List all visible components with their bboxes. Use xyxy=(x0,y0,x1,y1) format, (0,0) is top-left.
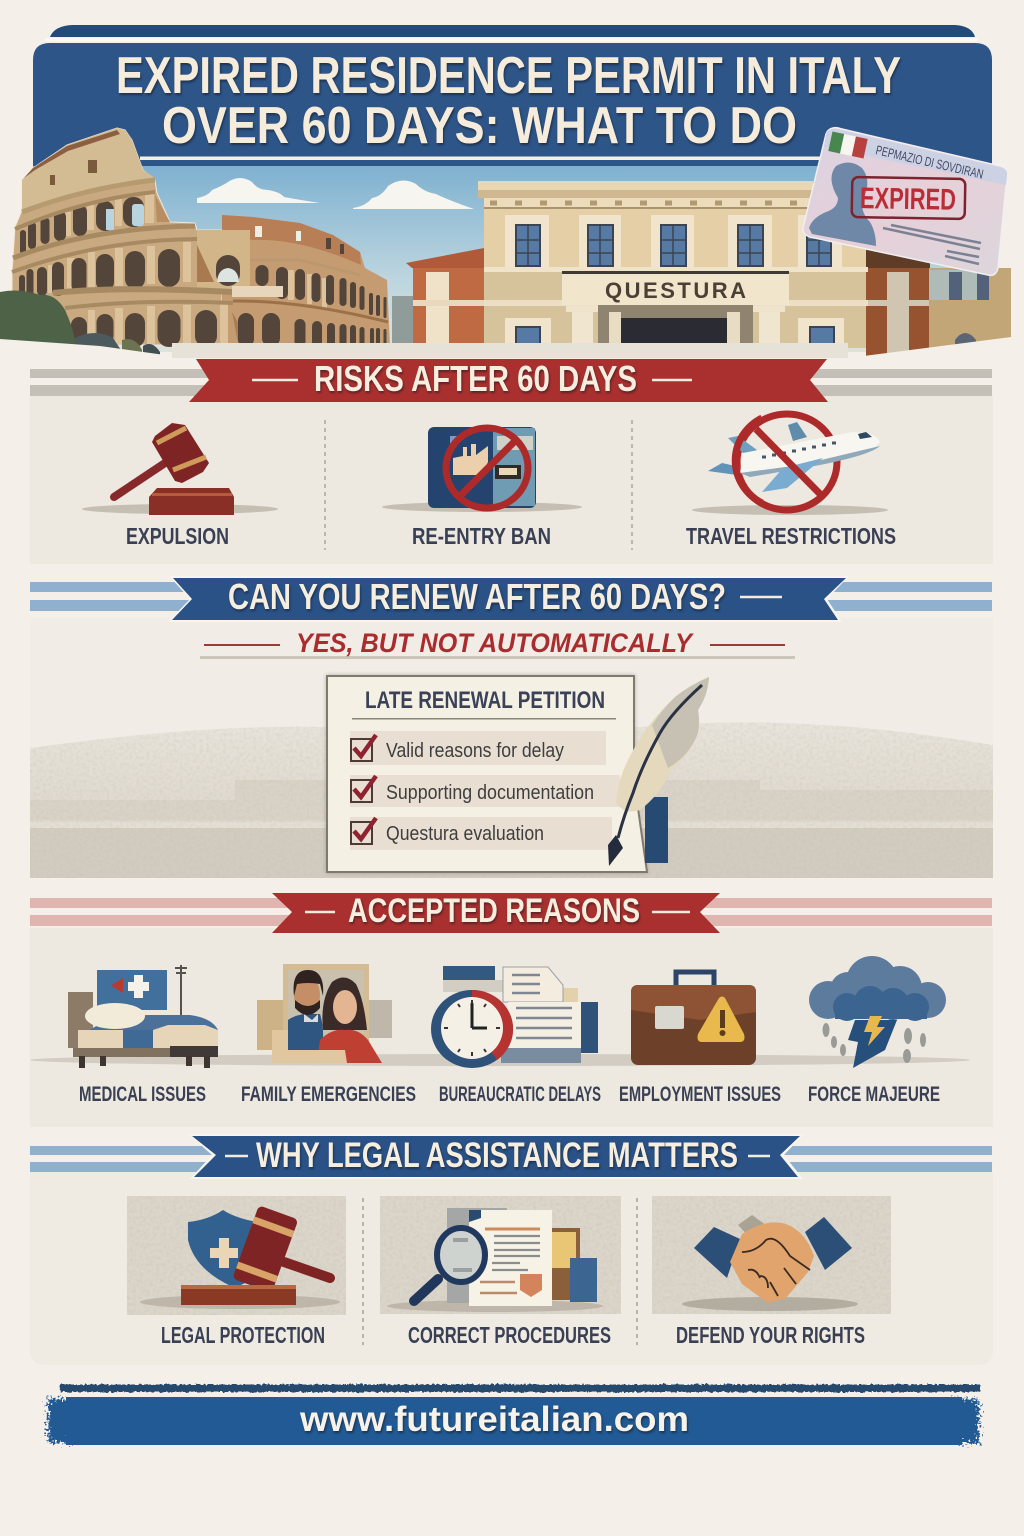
label: LEGAL PROTECTION xyxy=(161,1322,325,1348)
faded hill background xyxy=(30,720,993,878)
window surrounds xyxy=(505,215,844,348)
risks ribbon xyxy=(189,358,828,402)
colosseum walls xyxy=(12,128,222,345)
risks ribbon: RISKS AFTER 60 DAYS xyxy=(314,358,637,399)
shrubs xyxy=(0,291,160,358)
torn paper edge xyxy=(0,337,1024,372)
tile: legal protection xyxy=(127,1196,346,1315)
icon: re-entry ban passport xyxy=(382,427,582,512)
petition paper xyxy=(326,675,648,873)
colosseum piers xyxy=(48,191,327,344)
icon: quill xyxy=(608,677,709,866)
questura sign: QUESTURA xyxy=(605,278,746,303)
yes but not automatically: YES, BUT NOT AUTOMATICALLY xyxy=(296,628,695,658)
petition checklist: Supporting documentation xyxy=(386,782,594,804)
title xyxy=(116,47,901,155)
label: DEFEND YOUR RIGHTS xyxy=(676,1322,865,1348)
portico xyxy=(598,305,753,347)
icon: family photo xyxy=(257,964,392,1063)
questura sign xyxy=(562,271,789,305)
legal ribbon: WHY LEGAL ASSISTANCE MATTERS xyxy=(256,1136,738,1175)
accepted ribbon: ACCEPTED REASONS xyxy=(348,892,640,930)
label: FORCE MAJEURE xyxy=(808,1083,940,1106)
label: TRAVEL RESTRICTIONS xyxy=(686,523,896,549)
website url: www.futureitalian.com xyxy=(299,1400,689,1439)
colosseum xyxy=(0,128,390,358)
petition checklist: Valid reasons for delay xyxy=(386,740,564,762)
clouds xyxy=(197,178,474,209)
label: BUREAUCRATIC DELAYS xyxy=(439,1083,601,1106)
icon: hospital bed xyxy=(68,965,218,1068)
label: RE-ENTRY BAN xyxy=(412,523,551,549)
petition checklist xyxy=(350,731,620,850)
section: accepted reasons xyxy=(30,892,993,1127)
header banner xyxy=(33,25,992,168)
icon: gavel xyxy=(82,423,278,515)
expired stamp: EXPIRED xyxy=(860,182,956,217)
left wing xyxy=(406,248,484,268)
colosseum cornice bands xyxy=(12,180,388,322)
main facade xyxy=(484,198,866,348)
colosseum sky openings xyxy=(106,204,239,282)
tile: defend your rights xyxy=(652,1196,891,1314)
icon: storm cloud xyxy=(809,956,946,1068)
section: why legal assistance matters xyxy=(30,1134,993,1365)
expired stamp xyxy=(852,177,965,219)
icon: travel restrictions plane xyxy=(692,414,888,515)
silhouette xyxy=(809,162,876,246)
right wing xyxy=(866,250,930,270)
yes but not automatically xyxy=(200,628,795,659)
renew ribbon: CAN YOU RENEW AFTER 60 DAYS? xyxy=(228,576,726,617)
italian flag xyxy=(828,131,868,159)
icon: briefcase warning xyxy=(631,972,756,1065)
title: OVER 60 DAYS: WHAT TO DO xyxy=(162,97,797,155)
label: FAMILY EMERGENCIES xyxy=(241,1083,416,1106)
section: can you renew after 60 days xyxy=(30,576,993,878)
questura building xyxy=(406,181,1011,358)
distant buildings xyxy=(392,296,413,346)
footer bar xyxy=(48,1384,980,1445)
label: MEDICAL ISSUES xyxy=(79,1083,206,1106)
label: CORRECT PROCEDURES xyxy=(408,1322,611,1348)
label: EMPLOYMENT ISSUES xyxy=(619,1083,781,1106)
hero scene xyxy=(0,128,1024,372)
expired permit card xyxy=(803,128,1007,275)
petition checklist: Questura evaluation xyxy=(386,823,544,845)
icon: clock and documents xyxy=(431,966,598,1068)
building windows xyxy=(516,225,834,349)
section: risks after 60 days xyxy=(30,358,993,564)
colosseum arches xyxy=(19,160,386,347)
tile: correct procedures xyxy=(380,1196,621,1314)
petition paper: LATE RENEWAL PETITION xyxy=(365,687,605,714)
label: EXPULSION xyxy=(126,523,229,549)
